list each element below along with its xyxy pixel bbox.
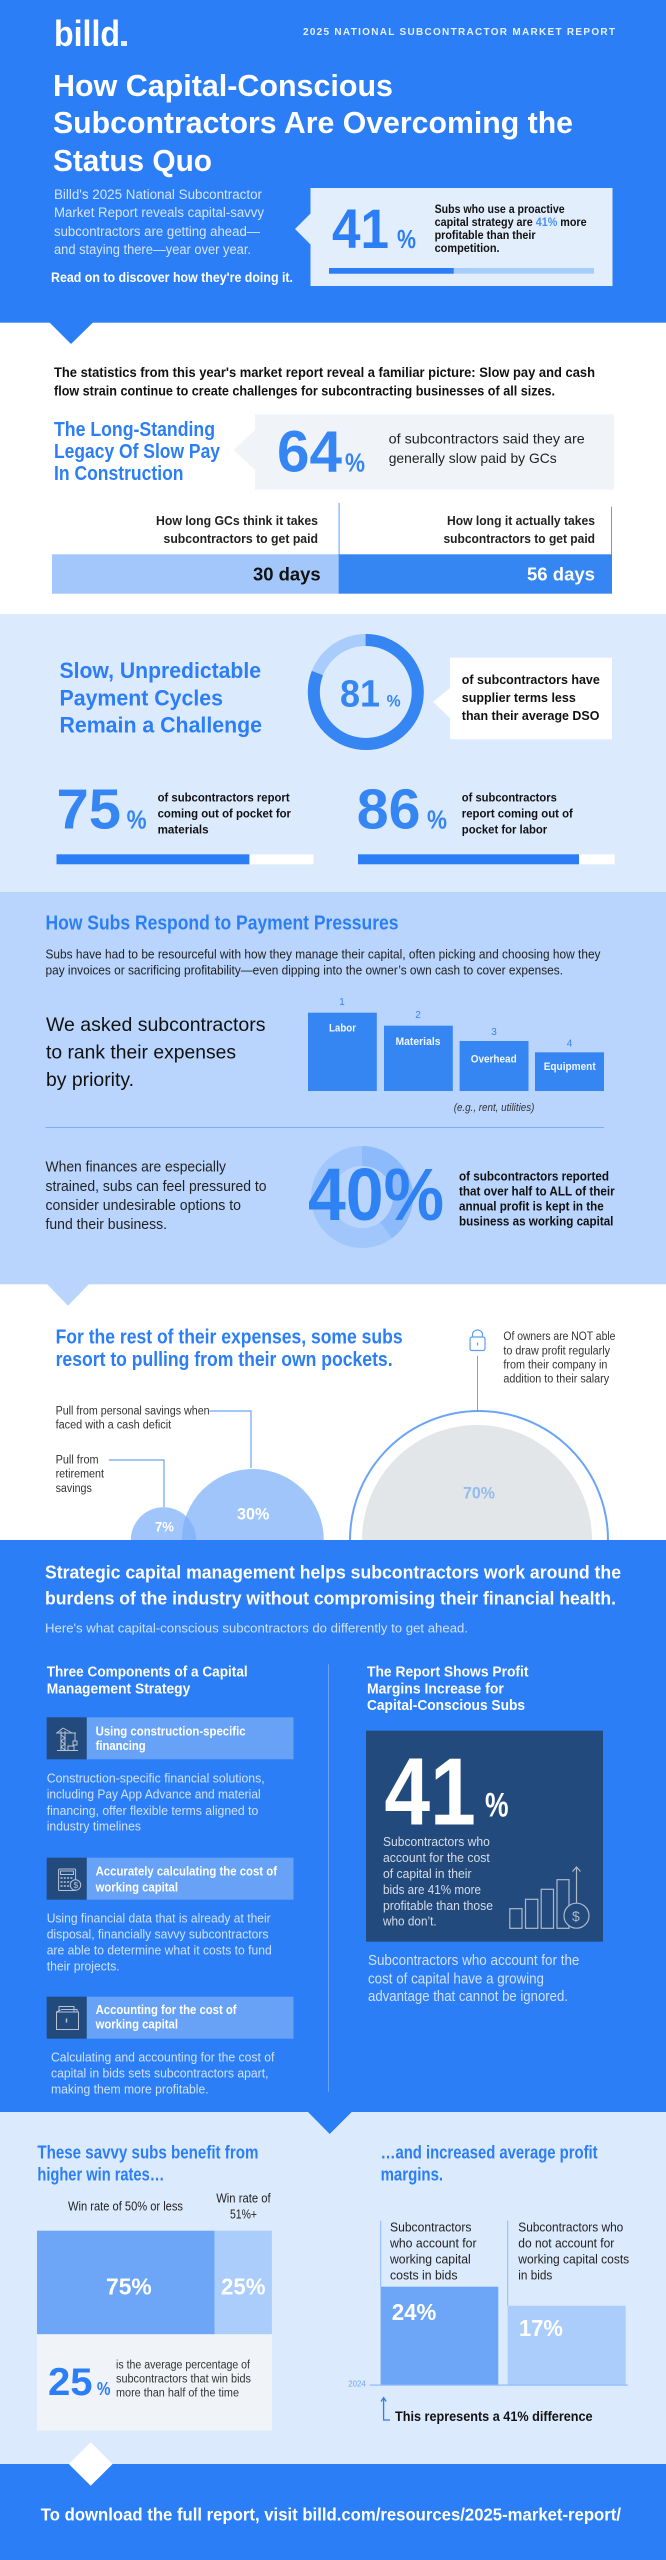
stat panel: 25%: % <box>97 2379 110 2399</box>
stat panel: 25%: is the average percentage of <box>116 2359 251 2371</box>
heading <box>54 419 221 485</box>
heading: How Subs Respond to Payment Pressures <box>46 912 398 934</box>
comparison: GC estimate vs actual: subcontractors to get paid <box>444 532 595 546</box>
component 3 <box>47 1997 294 2039</box>
stat panel: 64% <box>234 414 614 490</box>
panel: slow pay <box>52 365 614 594</box>
paragraph: pay invoices or sacrificing profitability—even dipping into the owner’s own cash to cover expenses. <box>46 962 563 977</box>
subhead: Here's what capital-conscious subcontractors do differently to get ahead. <box>45 1621 468 1636</box>
stat text: 40%: business as working capital <box>459 1215 613 1229</box>
stat: 86% labor: report coming out of <box>462 806 574 820</box>
panel: header <box>0 0 666 344</box>
chart: win rate split <box>37 2192 272 2334</box>
donut chart: 81% <box>314 640 418 744</box>
stat panel: 64%: 64 <box>277 420 342 485</box>
chart: semicircle 70%: 70% <box>463 1485 495 1503</box>
label: personal savings <box>56 1405 210 1432</box>
chart: win rate split: Win rate of <box>216 2192 271 2206</box>
heading: profit margins <box>381 2142 598 2184</box>
component 2 <box>47 1858 294 1900</box>
chart: win rate split: 51%+ <box>230 2207 257 2221</box>
callout: 41%: profitable than their <box>435 230 536 242</box>
bar chart: profit margins <box>348 2220 630 2389</box>
chart: win rate split: Win rate of 50% or less <box>68 2200 183 2214</box>
intro paragraph: Market Report reveals capital-savvy <box>54 205 264 220</box>
stat panel: 41%: bids are 41% more <box>383 1882 481 1897</box>
heading: Remain a Challenge <box>60 713 262 738</box>
stat panel: 64%: generally slow paid by GCs <box>389 450 557 466</box>
donut chart: 81%: % <box>387 692 401 711</box>
component 2 description: disposal, financially savvy subcontractors <box>47 1927 269 1942</box>
component 1 description: industry timelines <box>47 1819 141 1834</box>
bar chart: expense priority: Equipment <box>544 1061 596 1073</box>
text: owners not able to draw profit: to draw profit regularly <box>503 1345 610 1357</box>
icon: rising bars with dollar <box>510 1867 589 1928</box>
icon: calculator <box>59 1869 81 1890</box>
stat panel: 25%: more than half of the time <box>116 2388 239 2400</box>
callout: 41%: competition. <box>435 243 500 255</box>
callout: supplier terms: of subcontractors have <box>462 673 600 687</box>
text: growing advantage <box>368 1952 579 2005</box>
stat text: 40%: of subcontractors reported <box>459 1170 609 1184</box>
chart: semicircles 7% and 30%: 30% <box>237 1505 270 1523</box>
component 1 <box>47 1717 294 1759</box>
component 2 description: Using financial data that is already at their <box>47 1911 271 1926</box>
heading: Payment Cycles <box>60 686 223 711</box>
chart: semicircle 70% <box>350 1411 608 1669</box>
bar chart: expense priority: 4 <box>567 1039 573 1050</box>
heading <box>56 1326 403 1371</box>
panel: strategic capital management <box>0 1540 666 2112</box>
arrow: difference <box>381 2398 390 2420</box>
stat panel: 25%: 25 <box>48 2361 93 2404</box>
label: retirement savings: Pull from <box>56 1454 99 1466</box>
heading: profit margins: Margins Increase for <box>367 1681 504 1697</box>
component 2: working capital <box>95 1881 178 1895</box>
bar chart: profit margins: in bids <box>518 2268 553 2283</box>
stat panel: 41%: 41 <box>384 1738 476 1845</box>
bar chart: profit margins: costs in bids <box>390 2268 458 2283</box>
chart: win rate split: 75% <box>106 2273 152 2299</box>
bar chart: profit margins: 2024 <box>348 2379 366 2389</box>
text: owners not able to draw profit: from their company in <box>503 1360 607 1372</box>
text: finances strained: fund their business. <box>46 1216 167 1233</box>
component 1 description: financing, offer flexible terms aligned to <box>47 1803 258 1818</box>
headline <box>45 1562 621 1608</box>
stat panel: 41%: profitable than those <box>383 1898 493 1913</box>
bar chart: expense priority: 2 <box>415 1010 421 1021</box>
heading: win rates <box>37 2142 258 2184</box>
stat: 86% labor: 86 <box>357 777 420 841</box>
title <box>53 68 573 178</box>
stat text: 40%: that over half to ALL of their <box>459 1185 615 1199</box>
heading <box>60 658 262 738</box>
component 2: Accurately calculating the cost of <box>96 1865 278 1879</box>
component 3 description: making them more profitable. <box>51 2082 209 2097</box>
stat: 75% materials: materials <box>158 822 209 836</box>
report label: 2025 NATIONAL SUBCONTRACTOR MARKET REPORT <box>303 27 615 38</box>
title: Subcontractors Are Overcoming the <box>53 105 573 140</box>
panel: benefits <box>0 2112 666 2464</box>
intro statement: flow strain continue to create challenges for subcontracting businesses of all sizes. <box>54 384 555 399</box>
component 2 description <box>47 1911 272 1974</box>
bar chart: expense priority <box>308 997 604 1114</box>
bar chart: expense priority: Labor <box>329 1023 357 1035</box>
heading: profit margins: Capital-Conscious Subs <box>367 1698 525 1714</box>
component 1 description: Construction-specific financial solutions, <box>47 1770 265 1785</box>
heading: win rates: These savvy subs benefit from <box>37 2142 258 2162</box>
intro statement <box>54 365 595 399</box>
bar chart: expense priority: (e.g., rent, utilities) <box>454 1102 535 1114</box>
callout: supplier terms <box>433 658 612 739</box>
component 3 description: capital in bids sets subcontractors apart, <box>51 2066 268 2081</box>
headline: burdens of the industry without compromising their financial health. <box>45 1588 616 1608</box>
bar chart: profit margins: do not account for <box>518 2236 615 2251</box>
headline: Strategic capital management helps subcontractors work around the <box>45 1562 621 1582</box>
heading: For the rest of their expenses, some subs <box>56 1326 403 1348</box>
icon: folder <box>56 2006 78 2030</box>
chart: semicircles 7% and 30%: 7% <box>155 1519 175 1535</box>
text: finances strained: strained, subs can feel pressured to <box>46 1178 266 1195</box>
heading: profit margins <box>367 1665 529 1714</box>
panel: payment pressures <box>0 892 666 1306</box>
panel: payment cycles <box>0 614 666 892</box>
label: personal savings: faced with a cash deficit <box>56 1420 172 1432</box>
stat panel: 64%: of subcontractors said they are <box>389 430 585 446</box>
callout: supplier terms: supplier terms less <box>462 691 576 705</box>
text: owners not able to draw profit: addition to their salary <box>503 1374 609 1386</box>
icon: lock <box>470 1330 485 1350</box>
stat panel: 41%: account for the cost <box>383 1850 490 1865</box>
stat: 86% labor: of subcontractors <box>462 791 557 805</box>
label: retirement savings: savings <box>56 1483 92 1495</box>
stat: 75% materials: 75 <box>56 777 121 841</box>
intro statement: The statistics from this year's market report reveal a familiar picture: Slow pay and cash <box>54 365 595 380</box>
text: ranking prompt: by priority. <box>46 1069 134 1091</box>
chart: semicircles 7% and 30% <box>130 1469 324 1540</box>
component 2: $ <box>74 1881 79 1890</box>
bar chart: profit margins: 24% <box>392 2299 436 2325</box>
bar chart: profit margins: working capital <box>389 2252 471 2267</box>
icon: crane <box>56 1728 78 1750</box>
callout: 41%: capital strategy are 41% more <box>435 217 587 229</box>
heading: win rates: higher win rates… <box>37 2164 164 2184</box>
heading: profit margins: …and increased average profit <box>381 2142 598 2162</box>
stat panel: 41%: Subcontractors who <box>383 1834 490 1849</box>
donut chart: 81%: 81 <box>340 674 380 716</box>
bar chart: profit margins: Subcontractors <box>390 2220 472 2235</box>
intro paragraph: subcontractors are getting ahead— <box>54 224 260 239</box>
text: owners not able to draw profit <box>503 1331 615 1386</box>
component 1 description <box>47 1770 265 1834</box>
stat panel: 41% <box>366 1731 603 1942</box>
comparison: GC estimate vs actual: How long it actually takes <box>447 514 595 528</box>
text: finances strained: When finances are especially <box>46 1159 226 1176</box>
stat panel: 25% <box>37 2334 272 2431</box>
comparison: GC estimate vs actual: 30 days <box>253 565 321 585</box>
text: ranking prompt: to rank their expenses <box>46 1041 236 1063</box>
text: ranking prompt <box>46 1014 266 1091</box>
icon: rising bars with dollar: $ <box>572 1908 580 1924</box>
bar chart: expense priority: 3 <box>491 1027 497 1038</box>
heading: profit margins: margins. <box>381 2164 443 2184</box>
stat: 75% materials: coming out of pocket for <box>158 806 291 820</box>
stat panel: 64%: % <box>345 448 365 478</box>
intro paragraph: and staying there—year over year. <box>54 242 251 257</box>
callout: 41%: Subs who use a proactive <box>435 204 565 216</box>
stat: 75% materials: of subcontractors report <box>158 791 290 805</box>
heading: In Construction <box>54 463 184 485</box>
stat panel: 41%: of capital in their <box>383 1866 472 1881</box>
stat panel: 25%: subcontractors that win bids <box>116 2374 251 2386</box>
heading: profit margins: The Report Shows Profit <box>367 1665 529 1681</box>
heading: The Long-Standing <box>54 419 215 441</box>
component 1: financing <box>96 1739 146 1753</box>
text: finances strained: consider undesirable options to <box>46 1197 241 1214</box>
read on line: Read on to discover how they're doing it. <box>51 270 293 285</box>
logo: billd <box>54 13 120 54</box>
heading: three components: Three Components of a Capital <box>47 1665 248 1681</box>
text: owners not able to draw profit: Of owners are NOT able <box>503 1331 615 1343</box>
label: personal savings: Pull from personal savings when <box>56 1405 210 1417</box>
component 3 description <box>51 2050 275 2097</box>
component 1 description: including Pay App Advance and material <box>47 1786 261 1801</box>
text: difference: This represents a 41% difference <box>395 2409 593 2424</box>
intro paragraph: Billd's 2025 National Subcontractor <box>54 187 262 202</box>
component 2 description: are able to determine what it costs to fund <box>47 1943 272 1958</box>
stat: 75% materials <box>56 777 314 864</box>
comparison: GC estimate vs actual: How long GCs think it takes <box>156 514 318 528</box>
heading: three components: Management Strategy <box>47 1681 190 1697</box>
heading: three components <box>47 1665 248 1697</box>
text: ranking prompt: We asked subcontractors <box>46 1014 266 1036</box>
heading: Slow, Unpredictable <box>60 658 261 683</box>
bar chart: expense priority: Overhead <box>471 1053 517 1065</box>
bar chart: profit margins: who account for <box>389 2236 477 2251</box>
callout: supplier terms: than their average DSO <box>462 709 600 723</box>
heading: resort to pulling from their own pockets. <box>56 1349 393 1371</box>
bar chart: profit margins: working capital costs <box>517 2252 630 2267</box>
paragraph <box>46 946 601 977</box>
stat panel: 41%: % <box>485 1787 508 1825</box>
stat text: 40%: annual profit is kept in the <box>459 1200 604 1214</box>
stat: 86% labor: pocket for labor <box>462 822 548 836</box>
component 2 description: their projects. <box>47 1959 120 1974</box>
stat panel: 41%: who don’t. <box>382 1914 437 1929</box>
heading: Legacy Of Slow Pay <box>54 441 221 463</box>
intro paragraph <box>54 187 264 257</box>
callout: 41%: 41 <box>332 197 389 260</box>
stat: 86% labor: % <box>427 804 447 834</box>
text: growing advantage: Subcontractors who account for the <box>368 1952 579 1969</box>
text: growing advantage: advantage that cannot be ignored. <box>368 1988 568 2005</box>
chart: win rate split: 25% <box>221 2273 266 2299</box>
component 3 description: Calculating and accounting for the cost of <box>51 2050 275 2065</box>
component 1: Using construction-specific <box>96 1725 246 1739</box>
call to action text: To download the full report, visit billd.com/resources/2025-market-report/ <box>41 2505 621 2525</box>
diamond marker <box>69 2442 113 2486</box>
label: retirement savings: retirement <box>56 1469 105 1481</box>
title: Status Quo <box>53 143 212 178</box>
callout: 41% <box>295 188 612 286</box>
bar chart: expense priority: Materials <box>396 1036 440 1048</box>
text: growing advantage: cost of capital have a growing <box>368 1970 544 1987</box>
component 3: working capital <box>95 2017 178 2031</box>
bar chart: profit margins: 17% <box>519 2315 563 2341</box>
stat: 86% labor <box>357 777 615 864</box>
bar chart: expense priority: 1 <box>339 997 345 1008</box>
bar chart: profit margins: Subcontractors who <box>518 2220 623 2235</box>
paragraph: Subs have had to be resourceful with how they manage their capital, often picking and choosing how they <box>46 946 601 961</box>
title: How Capital-Conscious <box>53 68 393 103</box>
stat: 75% materials: % <box>127 804 147 834</box>
comparison: GC estimate vs actual: subcontractors to get paid <box>164 532 318 546</box>
donut chart: 40%: 40% <box>308 1153 444 1236</box>
callout: 41%: % <box>397 224 416 254</box>
panel: personal pockets <box>56 1328 615 1540</box>
panel: call to action <box>0 2442 666 2560</box>
comparison: GC estimate vs actual: 56 days <box>527 565 595 585</box>
label: retirement savings <box>56 1454 105 1495</box>
text: finances strained <box>46 1159 266 1233</box>
stat text: 40% <box>459 1170 615 1229</box>
component 3: Accounting for the cost of <box>96 2003 237 2017</box>
comparison: GC estimate vs actual <box>52 503 612 594</box>
